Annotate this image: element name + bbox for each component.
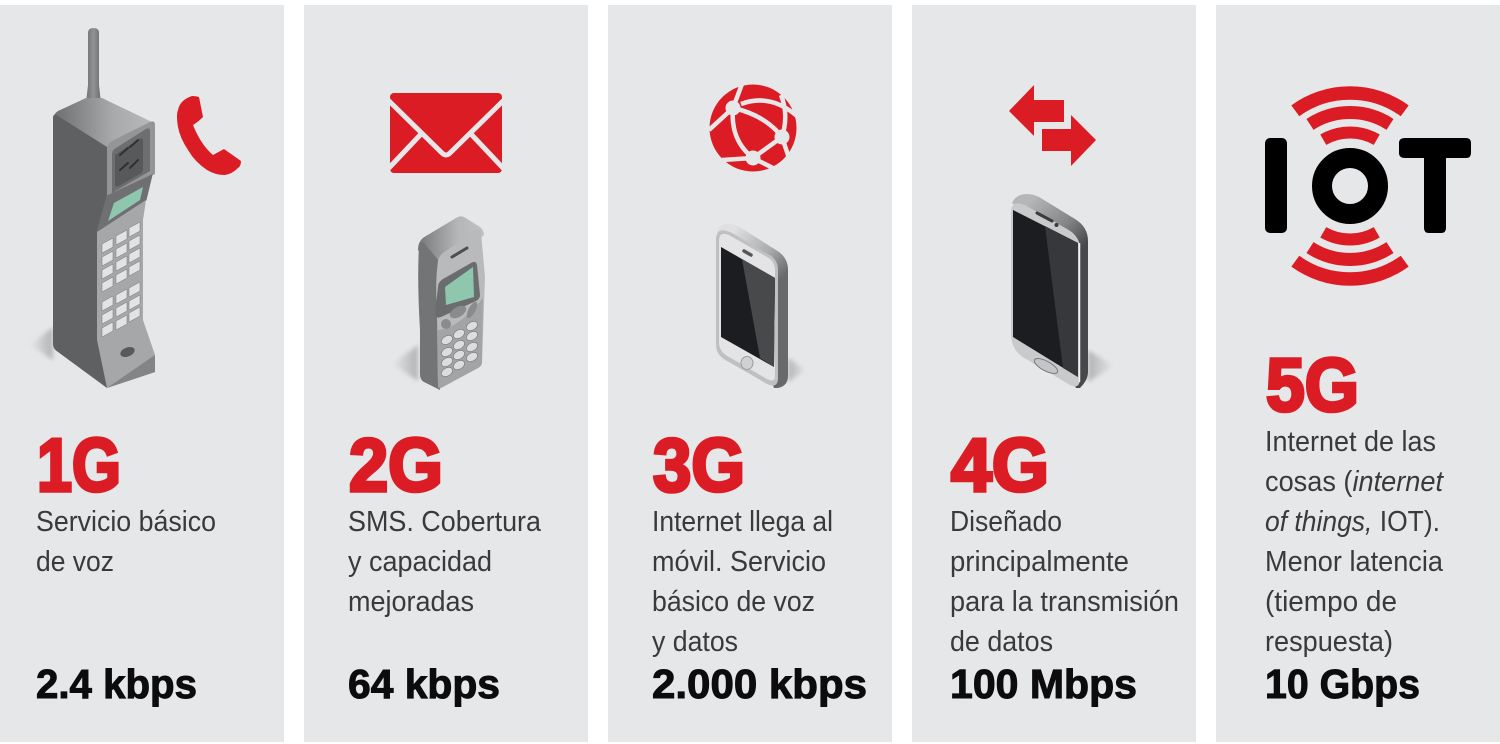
text: 1G description: Servicio básico: [36, 506, 216, 538]
text: 5G description: respuesta): [1265, 626, 1393, 658]
speed: 100 Mbps: 100 Mbps: [950, 661, 1137, 707]
text: 4G description: de datos: [950, 626, 1053, 658]
icon: smartphone with home button: [716, 224, 806, 388]
text: 4G description: principalmente: [950, 546, 1129, 578]
text: 3G description: Internet llega al: [652, 506, 833, 538]
text: 5G description: cosas (internet: [1265, 466, 1445, 498]
panel: 2G: [304, 5, 588, 742]
icon: large touchscreen phone: [1011, 194, 1114, 388]
icon: IOT logo with signal waves: [1265, 93, 1471, 279]
panel: 5G: [1216, 5, 1500, 742]
text: 1G description: [36, 506, 216, 578]
text: 5G description: Menor latencia: [1265, 546, 1444, 578]
text: 4G description: para la transmisión: [950, 586, 1179, 618]
speed: 2.4 kbps: 2.4 kbps: [36, 661, 197, 707]
text: 4G description: [950, 506, 1179, 658]
text: 2G description: mejoradas: [348, 586, 474, 618]
heading: 1G: 1G: [37, 423, 121, 507]
panel: 1G: [0, 5, 284, 742]
icon: feature phone: [392, 216, 485, 390]
text: 1G description: de voz: [36, 546, 114, 578]
icon: red network globe: [709, 84, 797, 172]
icon: brick phone: [30, 28, 155, 388]
text: 4G description: Diseñado: [950, 506, 1062, 538]
text: 3G description: móvil. Servicio: [652, 546, 826, 578]
text: 3G description: y datos: [652, 626, 738, 658]
icon: red data arrows: [1009, 85, 1096, 166]
heading: 5G: 5G: [1266, 343, 1359, 427]
speed: 64 kbps: 64 kbps: [348, 661, 500, 707]
text: 3G description: básico de voz: [652, 586, 815, 618]
text: 5G description: of things, IOT).: [1265, 506, 1440, 538]
icon: red handset: [177, 96, 241, 175]
text: 3G description: [652, 506, 833, 658]
heading: 4G: 4G: [951, 423, 1049, 507]
heading: 3G: 3G: [653, 423, 745, 507]
speed: 2.000 kbps: 2.000 kbps: [652, 661, 867, 707]
panel: 4G: [912, 5, 1196, 742]
speed: 10 Gbps: 10 Gbps: [1265, 661, 1420, 707]
text: 5G description: Internet de las: [1265, 426, 1436, 458]
text: 2G description: SMS. Cobertura: [348, 506, 542, 538]
text: 5G description: [1265, 426, 1445, 658]
text: 2G description: y capacidad: [348, 546, 492, 578]
heading: 2G: 2G: [349, 423, 443, 507]
panel: 3G: [608, 5, 892, 742]
text: 2G description: [348, 506, 542, 618]
icon: red envelope: [388, 93, 504, 173]
text: 5G description: (tiempo de: [1265, 586, 1397, 618]
